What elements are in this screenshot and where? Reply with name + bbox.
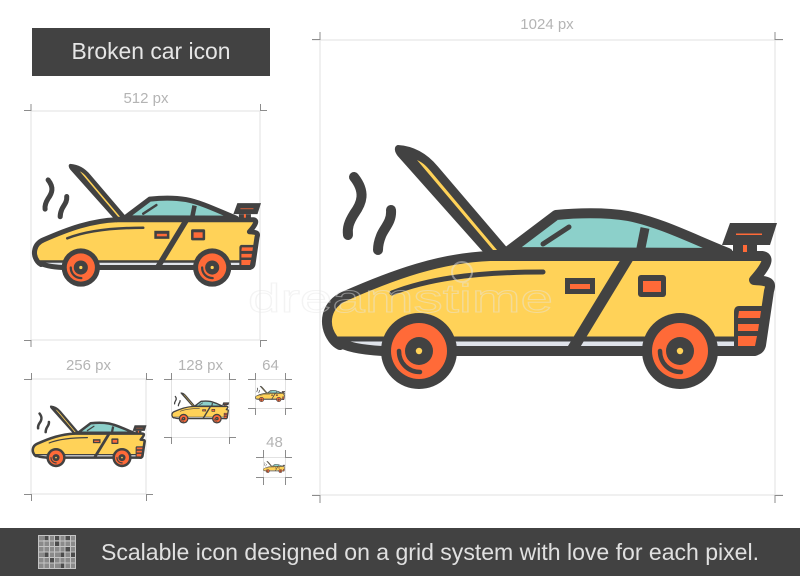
size label: 128 px: 128 px xyxy=(178,357,224,374)
icon: broken car large xyxy=(327,146,777,389)
size label: 256 px: 256 px xyxy=(66,357,112,374)
icon: broken car 256 xyxy=(33,406,147,467)
panel: 64 px preview xyxy=(248,357,292,415)
panel: 128 px preview xyxy=(164,357,236,444)
footer banner xyxy=(0,528,800,576)
panel: 1024 px preview xyxy=(312,16,783,503)
panel: 48 px preview xyxy=(256,434,292,485)
size label: 48: 48 xyxy=(266,434,283,451)
icon: broken car 64 xyxy=(255,386,285,402)
watermark xyxy=(248,262,553,321)
watermark: dreamstime xyxy=(248,277,553,321)
icon: pixel grid xyxy=(38,535,76,569)
icon: broken car 48 xyxy=(263,461,285,473)
size label: 512 px: 512 px xyxy=(123,90,169,107)
size label: 1024 px: 1024 px xyxy=(520,16,574,33)
panel: 512 px preview xyxy=(24,90,267,347)
size label: 64: 64 xyxy=(262,357,279,374)
panel: 256 px preview xyxy=(24,357,153,501)
icon: broken car 128 xyxy=(172,393,229,423)
icon: broken car 512 xyxy=(34,164,261,287)
title: Broken car icon xyxy=(72,38,230,64)
footer text: Scalable icon designed on a grid system with love for each pixel. xyxy=(101,539,759,565)
title xyxy=(32,28,270,76)
